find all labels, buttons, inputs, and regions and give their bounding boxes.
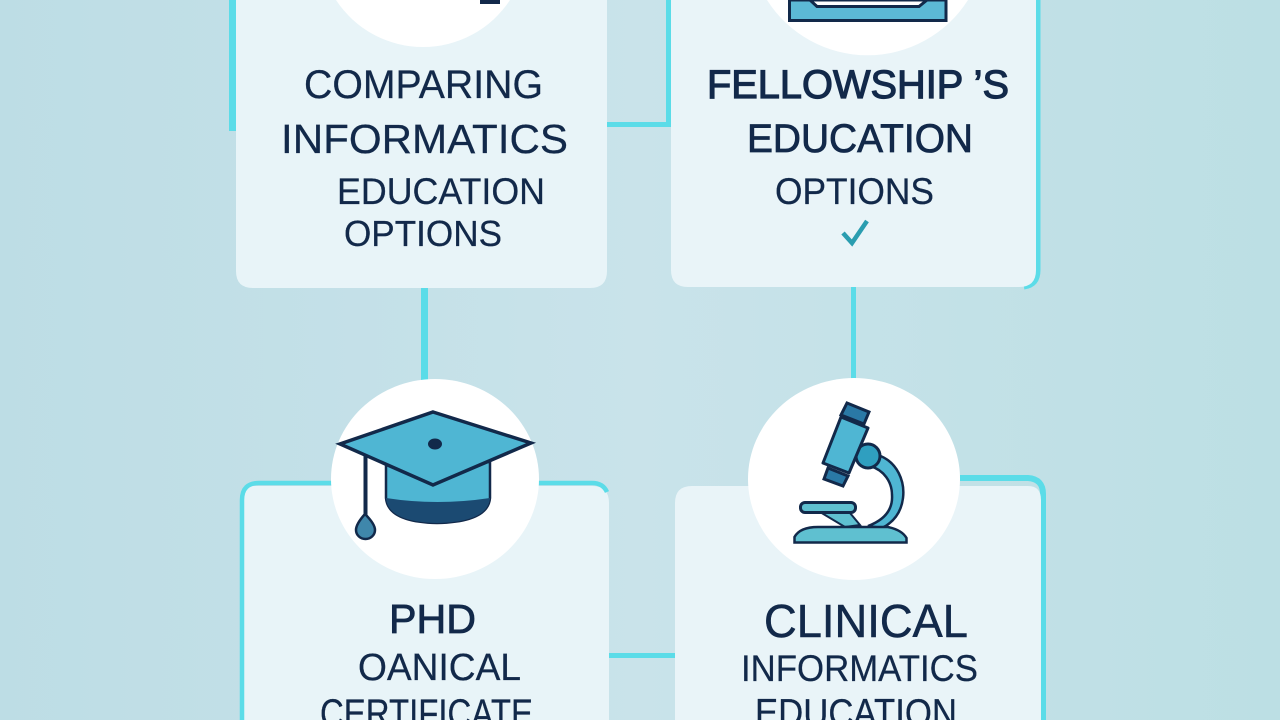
text: education options: EDUCATION <box>337 171 545 212</box>
connector lines <box>229 0 856 658</box>
cap body <box>386 462 490 523</box>
icon circle: microscope <box>748 378 960 580</box>
icon circle: top left <box>336 0 510 47</box>
icon: check mark <box>843 221 867 243</box>
heading: comparing informatics: COMPARING <box>304 63 543 107</box>
panel: fellowship's education options <box>671 0 1038 287</box>
panel: phd clinical certificate <box>242 379 609 720</box>
text: education options <box>337 171 545 254</box>
mortarboard <box>340 412 531 485</box>
heading: fellowship's education: FELLOWSHIP ’S <box>707 63 1009 107</box>
heading: fellowship's education <box>707 63 1009 161</box>
microscope tube <box>841 403 869 424</box>
microscope joint <box>856 444 880 468</box>
microscope base <box>794 527 906 542</box>
tassel <box>364 455 368 515</box>
text: education options: OPTIONS <box>344 213 502 254</box>
icon circle: monitor <box>767 0 968 55</box>
heading: phd: PHD <box>389 596 476 642</box>
text: options: OPTIONS <box>775 171 934 212</box>
text: informatics education <box>741 648 978 720</box>
panel: clinical informatics education <box>675 378 1043 720</box>
cap band <box>386 498 490 523</box>
heading: comparing informatics <box>281 63 568 162</box>
heading: clinical: CLINICAL <box>764 595 968 647</box>
microscope stand <box>820 512 860 527</box>
microscope arm <box>868 455 903 528</box>
heading: comparing informatics: INFORMATICS <box>281 116 568 162</box>
text: clinical certificate: OANICAL <box>358 647 521 689</box>
microscope stage <box>800 502 856 512</box>
text: clinical certificate <box>320 647 533 720</box>
text: informatics education: INFORMATICS <box>741 648 978 689</box>
panel: comparing informatics education options <box>236 0 607 288</box>
icon circle: graduation cap <box>331 379 539 579</box>
heading: fellowship's education: EDUCATION <box>747 117 973 161</box>
